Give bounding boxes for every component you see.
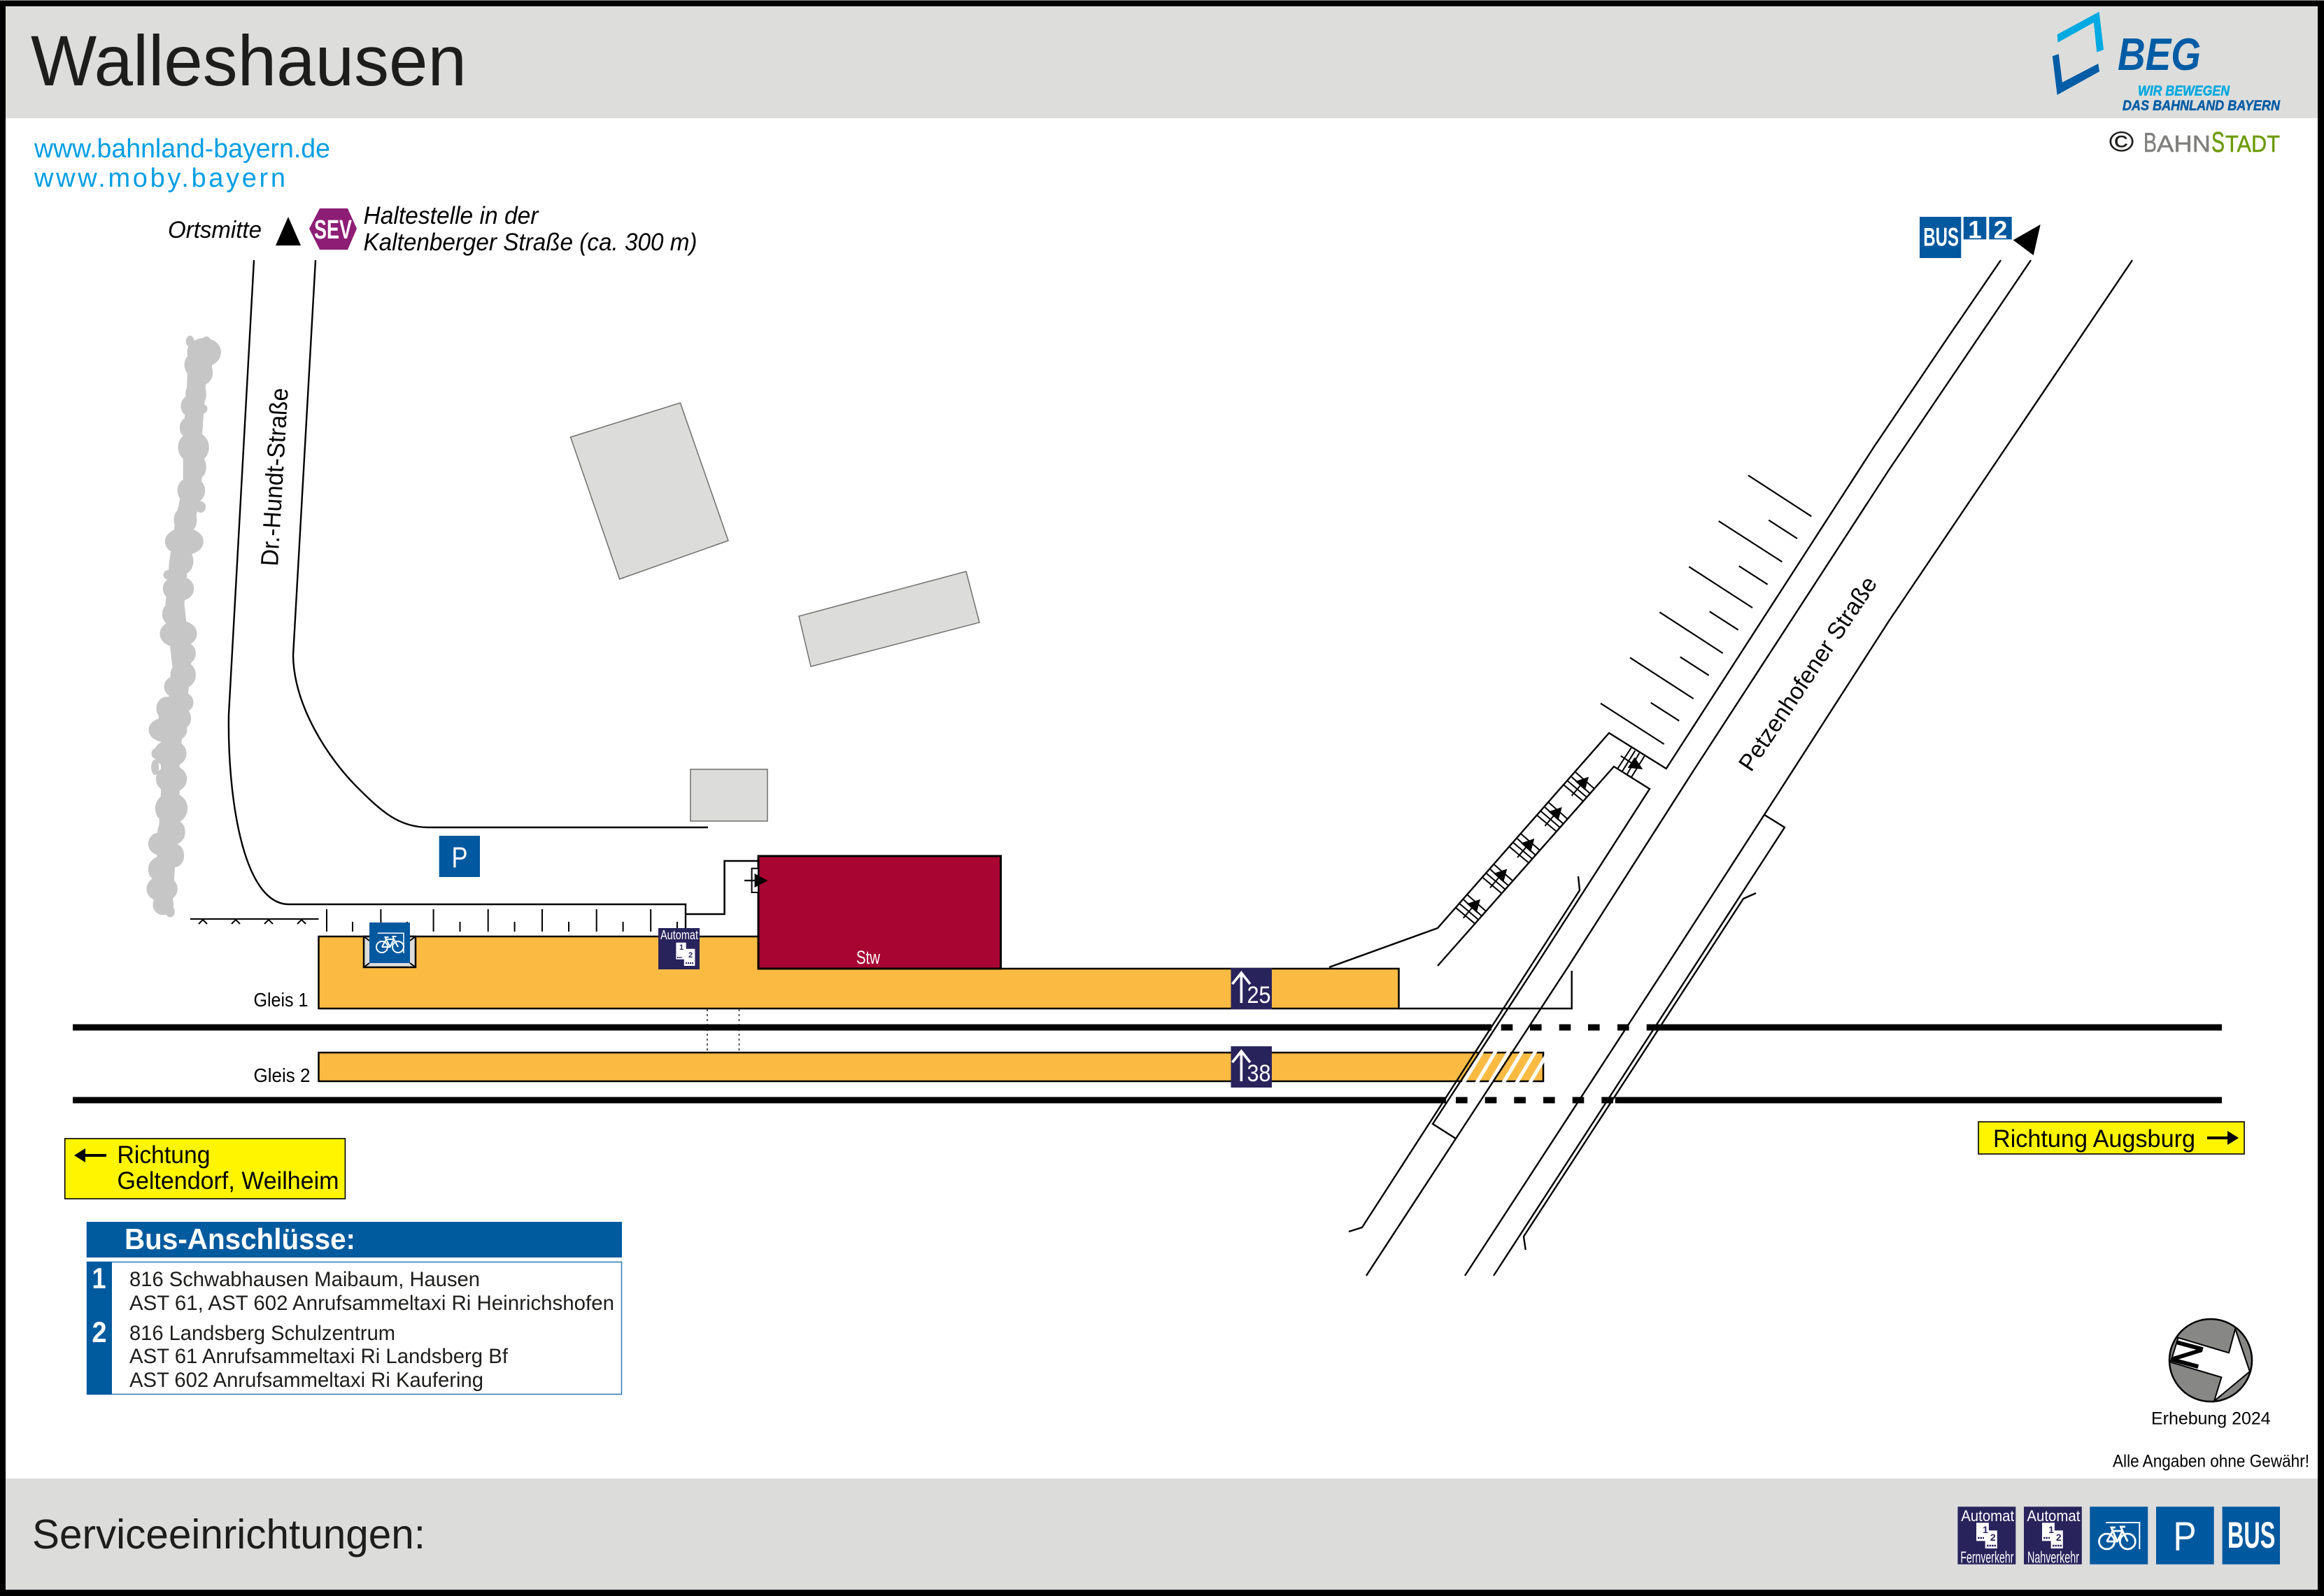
- bus connections table: 816 Schwabhausen Maibaum, Hausen: [129, 1268, 480, 1291]
- bus signs with arrow: [1920, 217, 2041, 258]
- bus connections table: [87, 1262, 621, 1395]
- path to signal box: [686, 861, 758, 914]
- copyright BahnStadt: S: [2211, 126, 2225, 158]
- stairs 4: [1537, 803, 1568, 832]
- buildings: [571, 403, 979, 821]
- copyright BahnStadt: [2109, 126, 2280, 158]
- stairs 3: [1510, 834, 1540, 863]
- service icon: ticket machine local: Automat: [2027, 1507, 2080, 1525]
- direction sign right: Richtung Augsburg: [1993, 1125, 2195, 1153]
- track 1: [73, 1024, 2222, 1031]
- service icon: ticket machine long distance: Automat: [1961, 1507, 2014, 1525]
- stairs 6 at road: [1618, 748, 1645, 777]
- stairs 2: [1482, 864, 1512, 893]
- ticket machine icon on platform: Automat: [660, 928, 698, 942]
- service icon: parking: P: [2173, 1514, 2197, 1560]
- SEV stop symbol: [309, 208, 357, 250]
- platform 2: [319, 1053, 1543, 1081]
- signal box Stw: Stw: [856, 947, 880, 968]
- service icon: ticket machine local: 2: [2056, 1532, 2062, 1543]
- bus connections table: AST 61 Anrufsammeltaxi Ri Landsberg Bf: [129, 1345, 509, 1368]
- bus signs with arrow: BUS: [1923, 223, 1959, 252]
- track 2: [73, 1097, 2222, 1104]
- bus connections table: 2: [92, 1316, 106, 1348]
- street label: Dr.-Hundt-Straße: Dr.-Hundt-Straße: [256, 387, 294, 567]
- BEG logo: DAS BAHNLAND BAYERN: [2123, 99, 2280, 114]
- bike parking icon on platform: [364, 922, 416, 967]
- service icon: ticket machine long distance: Fernverkehr: [1960, 1548, 2014, 1566]
- service icon: bike parking: [2090, 1506, 2148, 1565]
- service icon: ticket machine local: [2024, 1506, 2082, 1566]
- platform length sign 38: [1231, 1046, 1272, 1088]
- tree row: [148, 337, 220, 915]
- service icon: bus: [2223, 1506, 2280, 1565]
- platform 1: [319, 936, 1399, 1009]
- website links: www.bahnland-bayern.de: [34, 134, 330, 164]
- copyright BahnStadt: AHN: [2157, 131, 2211, 157]
- north arrow: [2163, 1319, 2252, 1402]
- bus connections heading: [87, 1222, 622, 1257]
- copyright BahnStadt: TADT: [2225, 131, 2280, 157]
- arrow: Ortsmitte: Ortsmitte: [168, 217, 262, 243]
- parking sign: [439, 836, 480, 877]
- Gleis labels: Gleis 1: [253, 989, 308, 1011]
- SEV stop note: Kaltenberger Straße (ca. 300 m): [364, 229, 697, 256]
- signal box Stw: [758, 856, 1000, 969]
- service icon: ticket machine long distance: 1: [1983, 1524, 1988, 1535]
- parking bay lines: [1601, 476, 1811, 744]
- service icon: ticket machine local: Nahverkehr: [2027, 1548, 2079, 1566]
- SEV stop symbol: SEV: [314, 215, 352, 245]
- title: Walleshausen: [31, 21, 467, 101]
- bus connections table: AST 61, AST 602 Anrufsammeltaxi Ri Heinrichshofen: [129, 1292, 614, 1315]
- ticket machine icon on platform: 1: [679, 943, 683, 952]
- bus connections table: AST 602 Anrufsammeltaxi Ri Kaufering: [129, 1369, 483, 1392]
- stairs 5: [1564, 772, 1594, 801]
- ticket machine icon on platform: 2: [688, 951, 693, 960]
- bus connections table: 816 Landsberg Schulzentrum: [129, 1322, 395, 1345]
- footer band: [6, 1479, 2318, 1590]
- platform length sign 25: [1231, 968, 1272, 1009]
- header band: [6, 6, 2318, 118]
- service icon: bus: BUS: [2227, 1515, 2275, 1556]
- footer heading: Serviceeinrichtungen:: [32, 1511, 425, 1558]
- stairs 1: [1456, 895, 1486, 924]
- bicycle stand ticks: [327, 909, 677, 932]
- bus connections heading: Bus-Anschlüsse:: [125, 1223, 355, 1255]
- north arrow: N: [2163, 1336, 2211, 1373]
- bus signs with arrow: 2: [1994, 217, 2007, 244]
- direction sign left: Richtung: [118, 1141, 210, 1169]
- direction sign left: [65, 1139, 345, 1199]
- survey year: Erhebung 2024: [2151, 1409, 2271, 1429]
- road: Petzenhofener Straße: [1349, 260, 2132, 1276]
- platform length sign 38: 38: [1247, 1060, 1270, 1087]
- website links: www.moby.bayern: [34, 164, 285, 193]
- service icon: ticket machine long distance: 2: [1990, 1532, 1996, 1543]
- parking sign: P: [452, 841, 467, 874]
- ticket machine icon on platform: [658, 928, 700, 969]
- SEV stop note: Haltestelle in der: [364, 202, 539, 229]
- entrance arrow at signal box: [744, 869, 768, 892]
- service icon: ticket machine local: 1: [2048, 1524, 2054, 1535]
- direction sign left: Geltendorf, Weilheim: [118, 1167, 339, 1195]
- direction sign right: [1978, 1122, 2244, 1154]
- platform 1 extension outline: [1399, 971, 1572, 1009]
- bridge ramp outline: [1329, 260, 2001, 1139]
- panel: bus connections: [87, 1222, 622, 1395]
- BEG logo: [2053, 12, 2280, 114]
- bus connections table: 1: [92, 1262, 106, 1295]
- road: Dr.-Hundt-Straße: [229, 260, 708, 936]
- SEV stop note: [364, 202, 697, 256]
- service icon: ticket machine long distance: [1957, 1506, 2015, 1566]
- website links: [34, 134, 330, 193]
- Gleis labels: Gleis 2: [253, 1064, 311, 1086]
- bus signs with arrow: 1: [1968, 217, 1982, 244]
- Gleis labels: [253, 989, 311, 1086]
- copyright BahnStadt: B: [2144, 128, 2157, 158]
- arrow: Ortsmitte: [168, 217, 301, 245]
- hedge line: [190, 919, 319, 924]
- BEG logo: BEG: [2118, 29, 2201, 80]
- copyright BahnStadt: ©: [2109, 127, 2134, 157]
- street label: Petzenhofener Straße: Petzenhofener Straße: [1734, 571, 1883, 776]
- BEG logo: WIR BEWEGEN: [2138, 84, 2230, 99]
- platform length sign 25: 25: [1247, 982, 1270, 1009]
- service icon: parking: [2156, 1506, 2214, 1565]
- underpass dotted lines: [707, 1009, 739, 1053]
